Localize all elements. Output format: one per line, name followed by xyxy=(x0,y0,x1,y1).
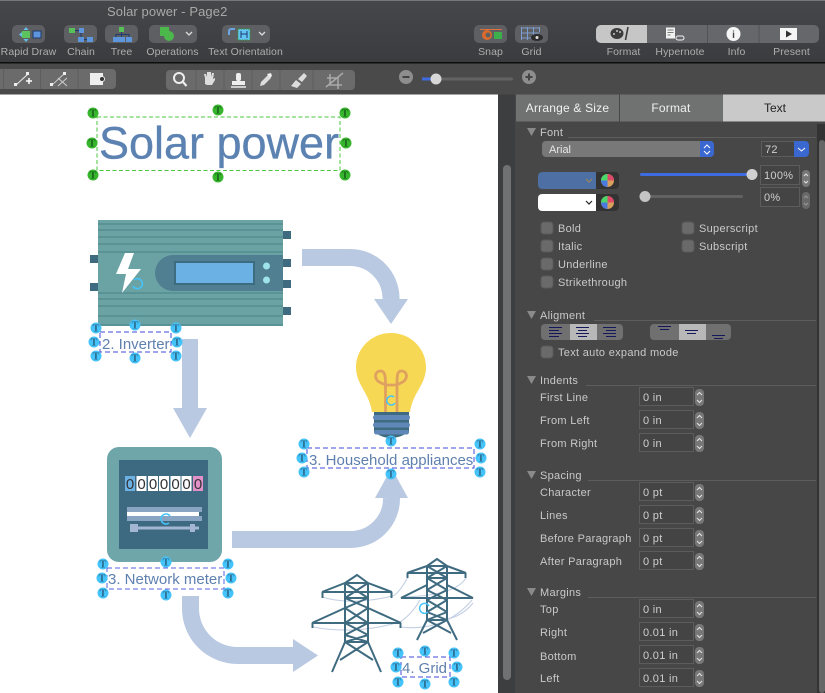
label: 3. Household appliances: 3. Household appliances xyxy=(309,452,473,469)
tool group: Format, Hypernote, Info, Present: Present xyxy=(773,46,810,58)
section: Font xyxy=(527,127,816,289)
label: 3. Household appliances: T xyxy=(477,439,484,450)
label: 3. Network meter: T xyxy=(225,588,232,599)
section: Indents: From Right xyxy=(540,438,597,450)
label: 4. Grid: T xyxy=(395,648,402,659)
label: 3. Network meter: T xyxy=(99,573,106,584)
section: Margins: Top xyxy=(540,604,559,616)
label: 2. Inverter: T xyxy=(91,337,98,348)
label: 2. Inverter: T xyxy=(174,337,181,348)
tool: Rapid Draw xyxy=(1,25,57,58)
tool group: Format, Hypernote, Info, Present: Hypernote xyxy=(655,46,705,58)
tool group: Format, Hypernote, Info, Present: Format xyxy=(607,46,640,58)
zoom slider xyxy=(399,70,536,84)
icon: transmission towers xyxy=(312,559,473,672)
view tool buttons xyxy=(166,70,355,90)
section: Font: Underline xyxy=(558,259,608,271)
section: Font: Italic xyxy=(558,241,583,253)
section: Spacing: 0 pt xyxy=(643,510,663,522)
panel: text format sidebar xyxy=(515,94,825,693)
title: T xyxy=(343,138,350,149)
section: Spacing: Before Paragraph xyxy=(540,533,632,545)
tabs: Arrange & Size xyxy=(526,101,609,115)
section: Font: Strikethrough xyxy=(558,277,627,289)
icon: network meter xyxy=(107,447,222,562)
label: 4. Grid: T xyxy=(422,646,429,657)
section: Font: Arial xyxy=(549,144,571,156)
secondary toolbar xyxy=(0,64,825,94)
section: Margins: 0.01 in xyxy=(643,627,678,639)
window title: Solar power - Page2 xyxy=(107,4,227,19)
label: 2. Inverter: T xyxy=(93,323,100,334)
section: Margins: Bottom xyxy=(540,651,577,663)
icon: network meter: 0 xyxy=(182,476,191,493)
icon: network meter: 0 xyxy=(149,476,157,493)
section: Alignment xyxy=(527,310,816,359)
section: Spacing: Lines xyxy=(540,510,568,522)
tool: Tree: Tree xyxy=(111,46,132,58)
label: 2. Inverter: T xyxy=(132,320,139,331)
section: Indents: Indents xyxy=(540,375,578,387)
icon: light bulb xyxy=(356,333,426,438)
title: T xyxy=(90,108,97,119)
section: Margins: Right xyxy=(540,627,567,639)
label: 3. Household appliances: T xyxy=(388,436,395,447)
tool: Chain: Chain xyxy=(67,46,95,58)
tool: Operations xyxy=(146,25,199,58)
section: Indents: 0 in xyxy=(643,392,662,404)
tool: Snap: Snap xyxy=(478,46,503,58)
section: Spacing: 0 pt xyxy=(643,487,663,499)
section: Margins: 0.01 in xyxy=(643,673,678,685)
section: Spacing: 0 pt xyxy=(643,556,663,568)
label: 2. Inverter: 2. Inverter xyxy=(102,336,170,353)
section: Indents: 0 in xyxy=(643,415,662,427)
tool: Text Orientation: Text Orientation xyxy=(208,46,283,58)
tool: Chain xyxy=(64,25,97,58)
arrow: meter to grid xyxy=(190,596,318,672)
section: Spacing: Spacing xyxy=(540,470,582,482)
panel scrollbar xyxy=(817,124,825,693)
label: 2. Inverter: T xyxy=(93,351,100,362)
canvas scrollbar xyxy=(498,94,515,693)
label: 2. Inverter: T xyxy=(132,353,139,364)
label: 3. Household appliances: T xyxy=(301,439,308,450)
label: 4. Grid: T xyxy=(422,679,429,690)
label: 3. Network meter: 3. Network meter xyxy=(108,571,222,588)
label: 4. Grid xyxy=(390,646,462,690)
label: 4. Grid: T xyxy=(393,662,400,673)
section: Font: Superscript xyxy=(699,223,758,235)
arrow: inverter to appliances xyxy=(302,258,408,324)
label: 3. Network meter: T xyxy=(228,573,235,584)
icon: network meter: 0 xyxy=(126,476,134,493)
label: 4. Grid: T xyxy=(395,677,402,688)
tool group: Format, Hypernote, Info, Present xyxy=(596,25,819,58)
point edit buttons xyxy=(0,69,116,89)
icon: inverter xyxy=(90,220,291,326)
label: 3. Household appliances: T xyxy=(477,467,484,478)
label: 2. Inverter: T xyxy=(173,351,180,362)
section: Margins: Left xyxy=(540,673,560,685)
icon: network meter: 0 xyxy=(160,476,168,493)
section: Margins: 0 in xyxy=(643,604,662,616)
label: 3. Household appliances: T xyxy=(388,469,395,480)
tool: Snap xyxy=(474,25,507,58)
section: Indents: From Left xyxy=(540,415,590,427)
tool: Rapid Draw: Rapid Draw xyxy=(1,46,57,58)
section: Font: Font xyxy=(540,127,563,139)
section: Font: Subscript xyxy=(699,241,748,253)
section: Margins xyxy=(527,587,816,687)
tabs: Format xyxy=(651,101,691,115)
label: 3. Household appliances: T xyxy=(478,453,485,464)
section: Font: 72 xyxy=(765,144,778,156)
label: 2. Inverter: T xyxy=(173,323,180,334)
title: Solar power xyxy=(99,118,339,168)
tool: Text Orientation xyxy=(208,25,283,58)
title: T xyxy=(90,170,97,181)
section: Spacing: 0 pt xyxy=(643,533,663,545)
label: 3. Household appliances: T xyxy=(299,453,306,464)
arrow: inverter to meter xyxy=(173,339,207,438)
arrow: meter to appliances xyxy=(232,468,408,540)
label: 3. Network meter: T xyxy=(163,557,170,568)
section: Alignment: Text auto expand mode xyxy=(558,347,679,359)
icon: network meter: 0 xyxy=(171,476,180,493)
section: Spacing: Character xyxy=(540,487,591,499)
main toolbar xyxy=(0,0,825,64)
label: 4. Grid: T xyxy=(451,677,458,688)
label: 3. Network meter: T xyxy=(163,590,170,601)
label: 4. Grid: T xyxy=(454,662,461,673)
label: 3. Household appliances xyxy=(296,436,486,480)
title: T xyxy=(89,138,96,149)
canvas xyxy=(0,94,498,693)
title: T xyxy=(342,108,349,119)
section: Alignment: Aligment xyxy=(540,310,585,322)
section: Spacing: After Paragraph xyxy=(540,556,622,568)
section: Font: 0% xyxy=(764,192,780,204)
label: 3. Network meter: T xyxy=(100,559,107,570)
title: T xyxy=(215,172,222,183)
section: Indents xyxy=(527,375,816,452)
tabs: Text xyxy=(764,101,787,115)
label: 3. Network meter xyxy=(96,556,236,601)
section: Indents: 0 in xyxy=(643,438,662,450)
tool: Operations: Operations xyxy=(146,46,199,58)
icon: network meter: 0 xyxy=(194,476,202,493)
tool group: Format, Hypernote, Info, Present: i xyxy=(732,30,735,41)
section: Margins: 0.01 in xyxy=(643,650,678,662)
tool: Tree xyxy=(105,25,138,58)
tool: Grid xyxy=(515,25,548,58)
tool: Grid: Grid xyxy=(521,46,542,58)
title: T xyxy=(215,105,222,116)
label: 3. Household appliances: T xyxy=(301,467,308,478)
label: 3. Network meter: T xyxy=(225,559,232,570)
section: Spacing xyxy=(527,470,816,570)
section: Indents: First Line xyxy=(540,392,588,404)
label: 2. Inverter xyxy=(88,320,182,364)
section: Margins: Margins xyxy=(540,587,581,599)
icon: network meter: 0 xyxy=(137,476,146,493)
label: 3. Network meter: T xyxy=(100,588,107,599)
label: 4. Grid: 4. Grid xyxy=(402,660,447,677)
tabs xyxy=(516,94,825,122)
tool group: Format, Hypernote, Info, Present: Info xyxy=(728,46,745,58)
section: Font: Bold xyxy=(558,223,581,235)
title: T xyxy=(342,170,349,181)
title xyxy=(86,104,352,183)
section: Font: 100% xyxy=(764,170,793,182)
label: 4. Grid: T xyxy=(451,648,458,659)
